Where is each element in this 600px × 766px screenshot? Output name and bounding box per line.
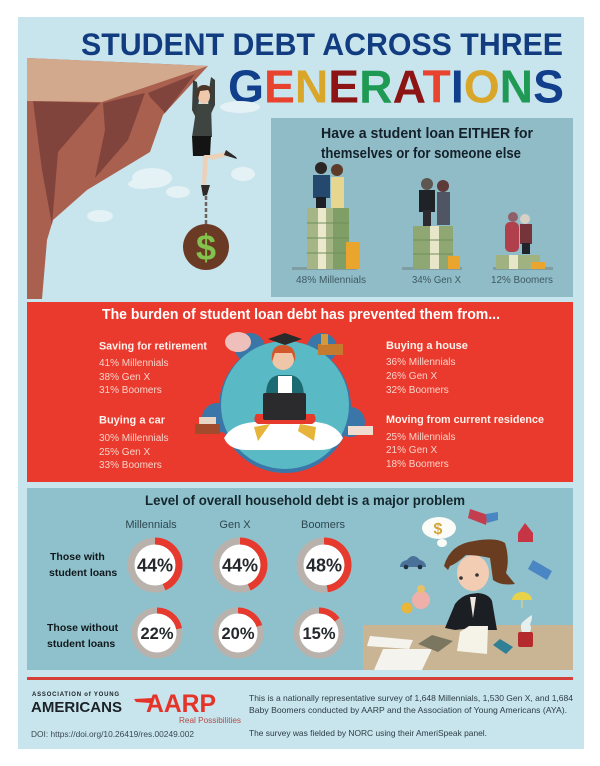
doi: DOI: https://doi.org/10.26419/res.00249.002 [31, 730, 195, 739]
panel heading: Have a student loan EITHER for [321, 126, 533, 142]
icon: piggy bank [412, 585, 430, 609]
boomers label: 12% Boomers [491, 275, 553, 286]
donut: gen x with loans 44%: 44% [222, 556, 258, 576]
thought bubble: $ [434, 521, 443, 538]
survey description: This is a nationally representative survey of 1,648 Millennials, 1,530 Gen X, and 1,684 [249, 694, 573, 703]
stat block: moving from current residence: Moving from current residence [386, 414, 544, 426]
boomers couple [505, 212, 532, 254]
mug with steam [518, 615, 533, 647]
icon: moving boxes [348, 426, 373, 435]
stat block: buying a car: Buying a car [99, 414, 166, 426]
column headers: Millennials [125, 519, 177, 531]
survey description: The survey was fielded by NORC using their AmeriSpeak panel. [249, 729, 487, 738]
icon: piggy bank [225, 332, 251, 352]
stat block: moving from current residence [386, 414, 544, 470]
worksheet [457, 626, 488, 654]
millennials stack [292, 162, 366, 286]
row label: without loans [47, 622, 119, 650]
logo: aarp: Real Possibilities [179, 716, 241, 725]
row label: without loans: Those without [47, 622, 119, 634]
donut: boomers with loans 48% [300, 541, 348, 589]
panel heading [321, 126, 533, 162]
stat block: moving from current residence: 18% Boomers [386, 459, 449, 470]
central illustration: graduate with laptop [195, 332, 373, 473]
donut: millennials with loans 44% [131, 541, 179, 589]
donut: millennials without loans 22%: 22% [140, 625, 174, 643]
donut: gen x without loans 20% [216, 610, 260, 656]
icon: coin [402, 602, 412, 614]
donut: gen x without loans 20%: 20% [221, 625, 255, 643]
donut charts [131, 541, 348, 656]
cliff [27, 58, 208, 299]
donut: millennials without loans 22% [134, 610, 180, 656]
stat block: saving for retirement: 31% Boomers [99, 385, 162, 396]
panel: student loan by generation [271, 118, 573, 297]
stat block: buying a house: 36% Millennials [386, 357, 455, 368]
stat block: saving for retirement: 38% Gen X [99, 372, 150, 383]
debt ball with dollar sign [183, 224, 229, 270]
footer [31, 690, 573, 739]
stat block: buying a car [99, 414, 168, 471]
title line 1: STUDENT DEBT ACROSS THREE [81, 26, 563, 62]
column headers: Gen X [219, 519, 251, 531]
calculator [418, 635, 453, 652]
icon: blue car [400, 556, 426, 569]
panel: burden of student loan debt [27, 302, 573, 482]
column headers: Boomers [301, 519, 346, 531]
red divider [27, 677, 573, 680]
panel: household debt [27, 488, 573, 670]
title [81, 26, 564, 112]
chain [205, 196, 207, 224]
stat block: buying a car: 33% Boomers [99, 460, 162, 471]
stat block: buying a house [386, 340, 468, 396]
papers [367, 636, 413, 649]
stat block: buying a house: Buying a house [386, 340, 468, 352]
row label: with loans: Those with [50, 551, 105, 563]
donut: millennials with loans 44%: 44% [137, 556, 173, 576]
stat block: moving from current residence: 21% Gen X [386, 445, 437, 456]
phone [493, 639, 513, 654]
survey description [249, 694, 573, 738]
gen x label: 34% Gen X [412, 275, 461, 286]
stat block: buying a house: 32% Boomers [386, 385, 449, 396]
gen x couple [419, 178, 450, 226]
burden heading: The burden of student loan debt has prevented them from... [102, 307, 500, 323]
row label: with loans [49, 551, 117, 579]
clouds [87, 101, 260, 222]
boomers stack [491, 212, 553, 286]
title line 2: generations: GENERATIONS [228, 60, 564, 112]
icon: house [318, 334, 343, 355]
donut: boomers without loans 15% [296, 610, 342, 656]
household debt heading: Level of overall household debt is a major problem [145, 492, 465, 508]
icon: credit cards [468, 509, 498, 525]
icon: card [528, 560, 552, 580]
row label: without loans: student loans [47, 638, 115, 650]
stat block: saving for retirement: Saving for retirement [99, 340, 207, 352]
stat block: moving from current residence: 25% Millennials [386, 432, 455, 443]
millennials couple [313, 162, 344, 208]
donut: gen x with loans 44% [216, 541, 264, 589]
illustration: woman hanging from cliff with debt weight [27, 58, 260, 299]
desk [363, 625, 573, 670]
stat block: buying a car: 25% Gen X [99, 447, 150, 458]
stat block: buying a house: 26% Gen X [386, 371, 437, 382]
woman [192, 77, 237, 196]
logo: association of young americans: AMERICANS [31, 699, 122, 716]
millennials label: 48% Millennials [296, 275, 366, 286]
illustration: worried woman at desk [363, 509, 573, 670]
gen x stack [402, 178, 462, 286]
row label: with loans: student loans [49, 567, 117, 579]
donut: boomers without loans 15%: 15% [302, 625, 336, 643]
icon: car [195, 417, 220, 434]
icon: umbrella [512, 592, 532, 608]
logo: aarp: AARP [146, 690, 216, 718]
donut: boomers with loans 48%: 48% [306, 556, 342, 576]
survey description: Baby Boomers conducted by AARP and the Association of Young Americans (AYA). [249, 706, 567, 715]
thought bubble [422, 517, 456, 547]
logo: aarp [134, 690, 241, 725]
column headers [125, 519, 346, 531]
stat block: saving for retirement [99, 340, 207, 396]
debt ball with dollar sign: $ [196, 227, 216, 268]
logo: association of young americans: ASSOCIATION of YOUNG [32, 692, 119, 698]
woman [444, 539, 515, 630]
panel heading: themselves or for someone else [321, 146, 521, 162]
stat block: buying a car: 30% Millennials [99, 433, 168, 444]
icon: house [518, 523, 533, 542]
stat block: saving for retirement: 41% Millennials [99, 358, 168, 369]
